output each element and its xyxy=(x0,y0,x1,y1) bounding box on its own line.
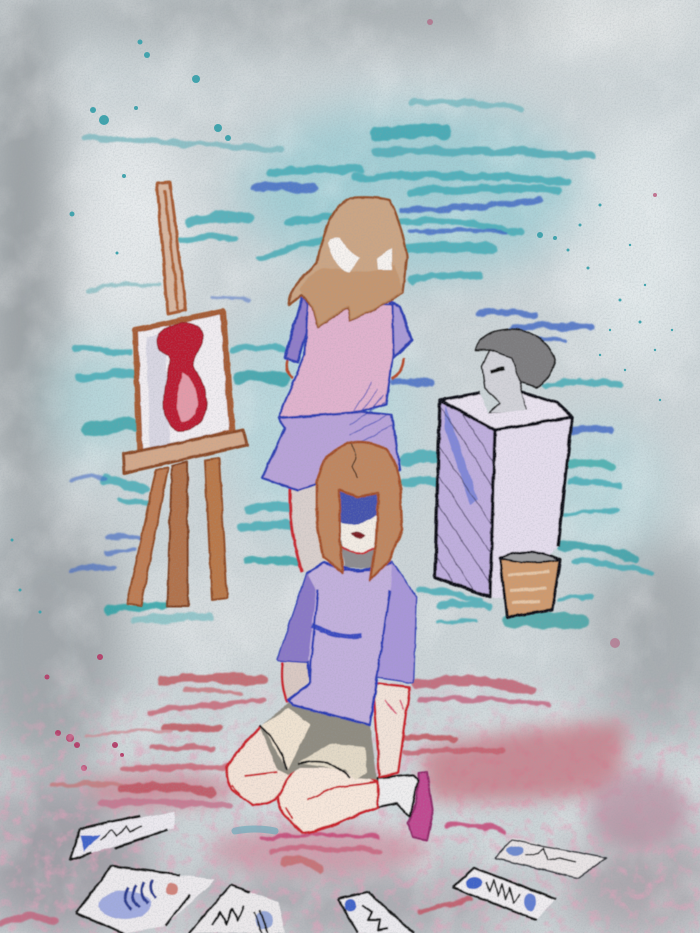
easel xyxy=(123,182,247,606)
seated girl right leg xyxy=(278,765,378,833)
pedestal top xyxy=(440,392,572,430)
paper 2 xyxy=(76,866,215,933)
easel left leg xyxy=(127,468,168,606)
seated girl hair parting xyxy=(352,444,358,478)
pedestal blue shading xyxy=(444,405,478,505)
teal dab on floor xyxy=(235,829,275,831)
pedestal hatching xyxy=(436,407,494,590)
easel right leg xyxy=(205,458,227,600)
paper 1 xyxy=(70,812,174,860)
seated girl left arm outline xyxy=(282,662,287,702)
standing girl xyxy=(262,197,412,575)
standing girl leg outline xyxy=(290,488,302,572)
seated girl chest fold xyxy=(312,625,362,637)
seated girl face shadow xyxy=(340,490,377,524)
standing girl dress xyxy=(278,300,393,418)
seated girl mouth xyxy=(351,532,366,539)
paper 5 xyxy=(453,868,556,920)
seated girl right sleeve shading xyxy=(377,562,416,682)
paper 4 xyxy=(338,892,414,933)
red paint pool on floor xyxy=(0,660,700,933)
easel canvas xyxy=(135,311,232,456)
scattered sketch papers xyxy=(70,812,606,933)
red vase on canvas xyxy=(157,322,207,431)
teal and blue water strokes xyxy=(72,102,652,622)
standing girl hair shadow xyxy=(300,265,403,327)
standing girl hair highlight xyxy=(328,238,392,272)
seated girl arm marks xyxy=(385,700,404,714)
seated girl hair xyxy=(317,442,402,580)
bucket xyxy=(500,552,560,617)
paper 3 xyxy=(189,885,285,933)
seated girl right thigh xyxy=(298,744,367,780)
seated girl slipper xyxy=(408,772,433,840)
pedestal ink outline xyxy=(435,392,572,597)
paper 6 xyxy=(495,838,606,878)
seated girl short hems xyxy=(260,726,350,778)
seated girl shirt xyxy=(278,562,416,725)
seated girl left leg xyxy=(227,728,300,805)
seated girl left arm xyxy=(282,662,308,700)
seated girl face xyxy=(340,490,378,553)
easel mast xyxy=(157,182,186,314)
easel centre leg xyxy=(167,462,188,606)
seated girl right arm xyxy=(373,683,410,777)
seated girl shorts xyxy=(260,702,377,780)
standing girl skirt xyxy=(262,412,400,490)
pedestal left face xyxy=(435,400,495,597)
standing girl hands xyxy=(286,358,404,378)
seated girl knee marks xyxy=(232,772,377,818)
seated girl chin line xyxy=(340,546,376,553)
easel ledge xyxy=(123,430,247,473)
standing girl right sleeve xyxy=(390,302,412,358)
standing girl left sleeve xyxy=(285,295,312,362)
seated girl collar xyxy=(343,566,376,571)
splatter dots xyxy=(10,19,673,771)
standing girl hatching xyxy=(350,382,392,445)
seated girl sock xyxy=(378,775,418,817)
pedestal with bust xyxy=(435,329,572,617)
standing girl hair xyxy=(288,197,407,327)
seated girl left thigh xyxy=(262,708,310,770)
seated girl xyxy=(227,442,433,840)
seated girl left sleeve shading xyxy=(278,573,316,662)
seated girl neck xyxy=(340,540,376,568)
pedestal right face xyxy=(490,417,572,598)
standing girl legs xyxy=(290,486,332,575)
plaster bust xyxy=(475,329,555,414)
